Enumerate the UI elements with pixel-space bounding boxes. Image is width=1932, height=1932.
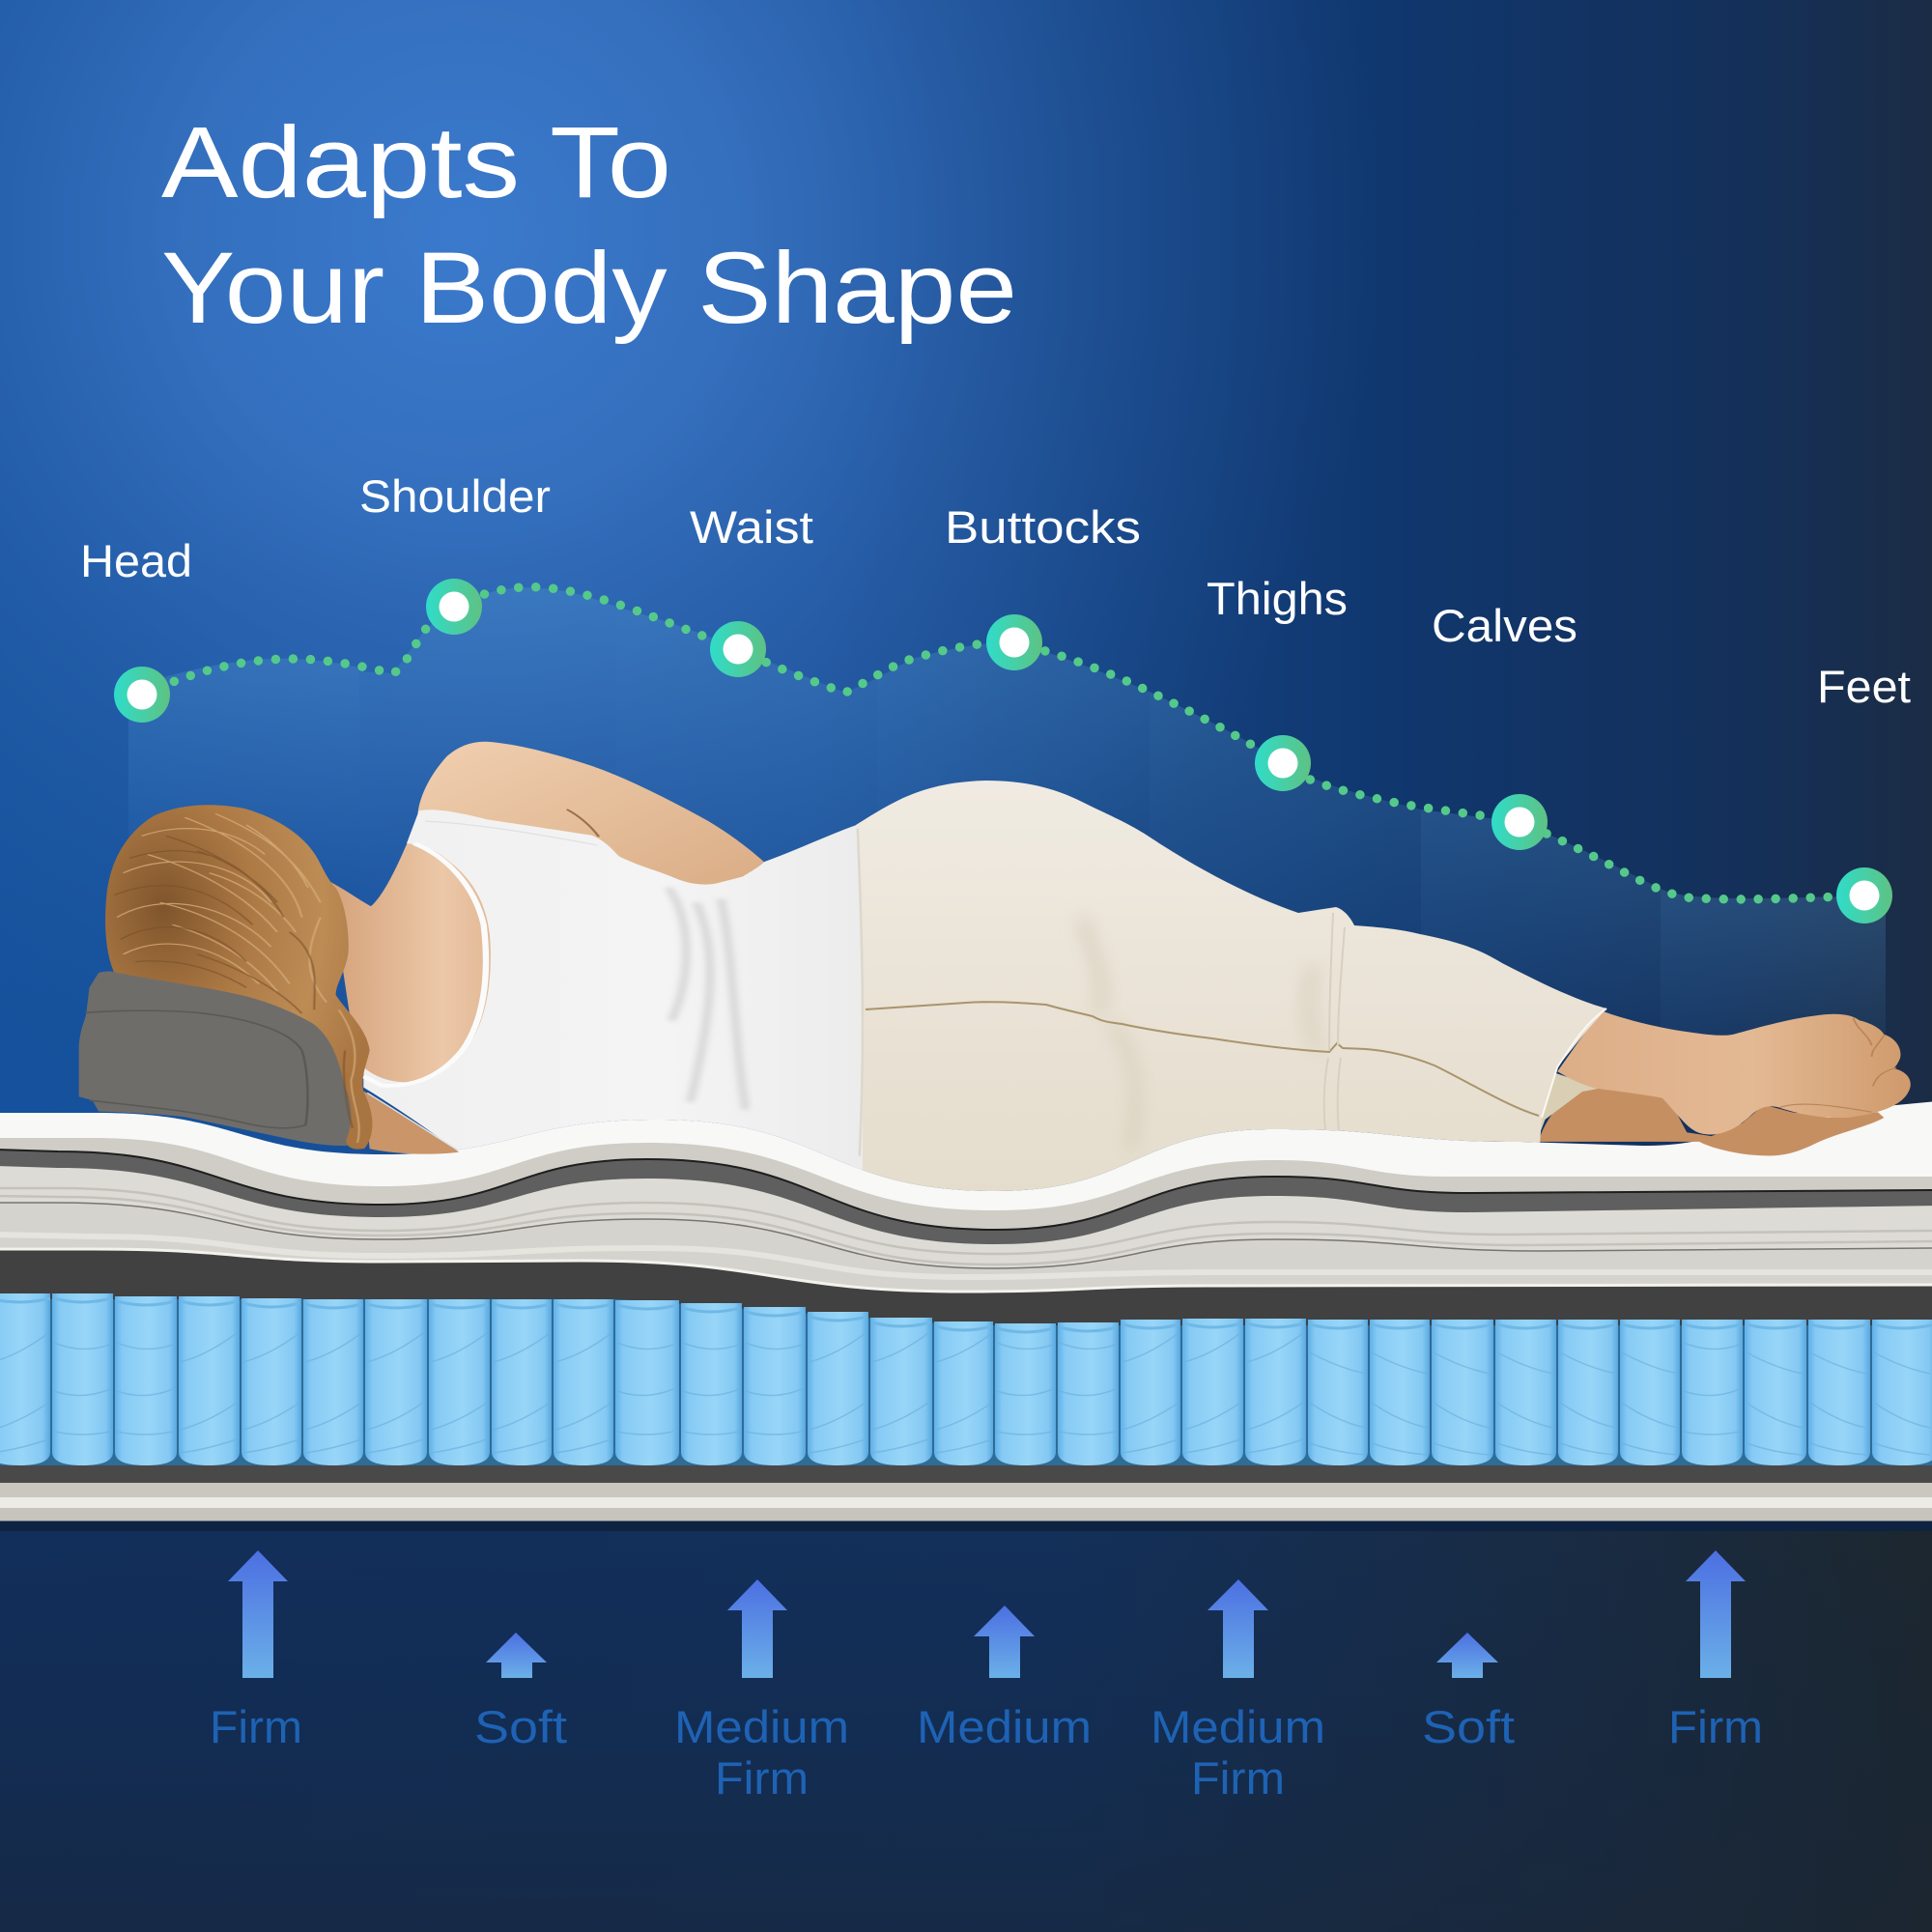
pocket spring coils [0,1293,1932,1466]
bottom panel [0,1517,1932,1932]
firmness labels: Firm [1668,1701,1763,1752]
firmness arrow 3 [727,1579,787,1678]
upper foot [1557,1010,1911,1134]
marker: head [114,667,170,723]
trouser lining [1536,1067,1601,1144]
body zone labels: Feet [1817,661,1911,712]
pressure columns under curve [128,587,1886,1101]
layer: base strip light [0,1497,1932,1508]
arm and bare back [329,742,764,1154]
layer: grey comfort foam [0,1138,1932,1517]
marker: feet [1836,867,1892,923]
body zone labels: Head [80,535,192,586]
marker: shoulder [426,579,482,635]
firmness labels: Firm [210,1701,302,1752]
feet [1536,1010,1911,1155]
lower foam highlight [0,1235,1932,1277]
title: Adapts To [161,106,671,219]
lower foot [1539,1079,1884,1155]
body zone labels: Shoulder [359,470,551,522]
body zone labels: Calves [1432,600,1577,651]
firmness labels [210,1701,1763,1804]
marker: calves [1492,794,1548,850]
pillow [79,971,356,1146]
firmness labels: Firm [1191,1752,1285,1804]
background gradient [0,0,1932,1526]
title: Your Body Shape [161,232,1017,345]
firmness labels: Firm [715,1752,809,1804]
layer: lower support foam [0,1203,1932,1517]
body zone labels: Thighs [1207,573,1348,624]
firmness labels: Medium [674,1701,849,1752]
firmness arrow 7 [1686,1550,1746,1678]
trousers [850,781,1606,1217]
marker: thighs [1255,735,1311,791]
layer: dark foam [0,1150,1932,1517]
marker: waist [710,621,766,677]
layer: charcoal foam [0,1249,1932,1517]
firmness labels: Medium [917,1701,1092,1752]
marker: buttocks [986,614,1042,670]
layer: pale foam [0,1166,1932,1517]
body zone labels [80,470,1911,712]
mattress cross-section [0,1101,1932,1520]
dotted comfort curve [142,587,1864,899]
firmness arrow 4 [974,1605,1035,1678]
firmness arrow 5 [1208,1579,1268,1678]
body zone labels: Waist [690,501,813,553]
firmness arrow 6 [1436,1633,1498,1678]
firmness labels: Soft [1422,1701,1515,1752]
body zone labels: Buttocks [945,501,1141,553]
hair [105,805,372,1150]
sleeping woman [79,742,1911,1232]
white tank top [363,810,864,1170]
layer: white quilted top [0,1101,1932,1517]
layer: base dark foam [0,1465,1932,1483]
pale foam contour lines [0,1188,1932,1264]
firmness labels: Soft [474,1701,567,1752]
firmness arrow 1 [228,1550,288,1678]
layer: base strip grey [0,1483,1932,1497]
firmness arrow 2 [486,1633,547,1678]
layer: base strip bottom [0,1508,1932,1520]
title [161,106,1017,345]
firmness labels: Medium [1151,1701,1325,1752]
